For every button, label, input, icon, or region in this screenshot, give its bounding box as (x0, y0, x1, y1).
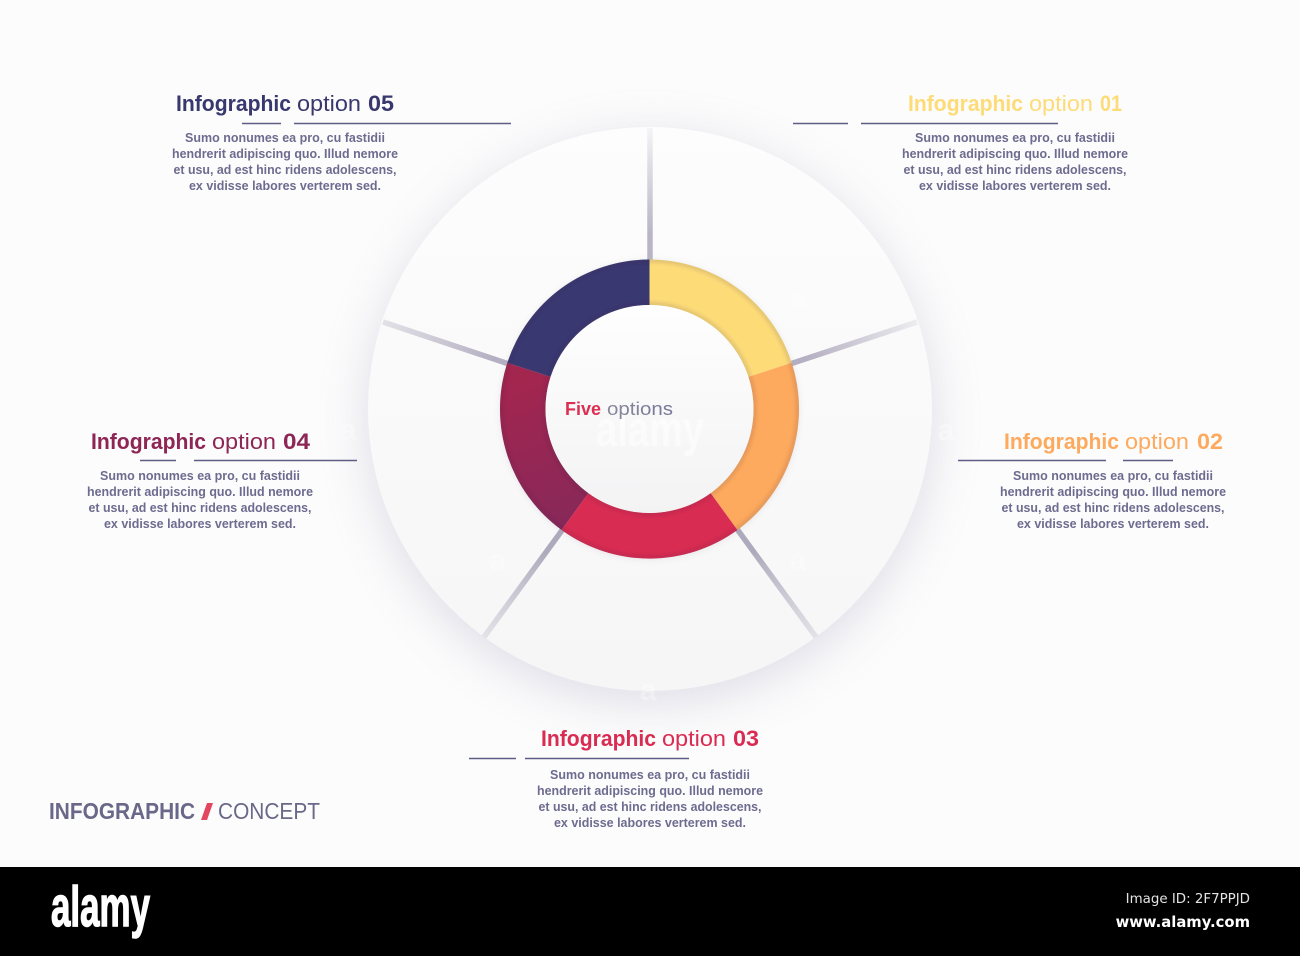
concept label: INFOGRAPHIC (49, 798, 195, 824)
spokes (383, 128, 917, 637)
option 02 (958, 429, 1226, 531)
segment 01 yellow (650, 260, 792, 377)
body text: ex vidisse labores verterem sed. (104, 517, 296, 531)
body text: Sumo nonumes ea pro, cu fastidii (1013, 469, 1213, 483)
watermark marks: a (490, 544, 507, 577)
heading (91, 429, 311, 454)
website: www.alamy.com (1116, 914, 1250, 931)
body text (172, 131, 398, 193)
heading (541, 726, 759, 751)
watermark: alamy (596, 401, 704, 457)
heading: option (1125, 429, 1189, 454)
heading (908, 91, 1122, 116)
heading: option (1029, 91, 1093, 116)
watermark marks: a (340, 414, 357, 447)
body text: hendrerit adipiscing quo. Illud nemore (1000, 485, 1226, 499)
watermark marks (340, 282, 955, 707)
body text: Sumo nonumes ea pro, cu fastidii (550, 768, 750, 782)
body text (1000, 469, 1226, 531)
watermark marks: a (640, 674, 657, 707)
option 04 (87, 429, 357, 531)
heading (176, 91, 394, 116)
center label (565, 399, 673, 419)
option 03 (469, 726, 763, 830)
body text: hendrerit adipiscing quo. Illud nemore (902, 147, 1128, 161)
rule (958, 460, 1173, 462)
heading: Infographic (91, 429, 206, 454)
heading: Infographic (908, 91, 1023, 116)
body text (902, 131, 1128, 193)
footer band (0, 867, 1300, 956)
segment 03 red (562, 493, 737, 559)
rule (469, 758, 689, 760)
body text: ex vidisse labores verterem sed. (554, 816, 746, 830)
option 01 (793, 91, 1128, 193)
heading: 02 (1197, 429, 1223, 454)
inner disc (546, 305, 754, 513)
image id: Image ID: 2F7PPJD (1126, 892, 1250, 907)
rule (140, 460, 357, 462)
heading: Infographic (176, 91, 291, 116)
body text: ex vidisse labores verterem sed. (919, 179, 1111, 193)
body text: ex vidisse labores verterem sed. (189, 179, 381, 193)
heading: option (662, 726, 726, 751)
heading: option (212, 429, 276, 454)
watermark marks: a (790, 282, 807, 315)
body text: ex vidisse labores verterem sed. (1017, 517, 1209, 531)
body text: Sumo nonumes ea pro, cu fastidii (185, 131, 385, 145)
body text: Sumo nonumes ea pro, cu fastidii (100, 469, 300, 483)
body text: Sumo nonumes ea pro, cu fastidii (915, 131, 1115, 145)
concept label (49, 798, 320, 824)
body text: hendrerit adipiscing quo. Illud nemore (87, 485, 313, 499)
heading: option (297, 91, 361, 116)
heading: 01 (1100, 91, 1122, 116)
icon: slash (201, 803, 213, 820)
watermark marks: a (790, 544, 807, 577)
alamy logo: alamy (51, 875, 150, 939)
center label: Five (565, 399, 601, 419)
rule (793, 122, 1058, 124)
heading: Infographic (1004, 429, 1119, 454)
body text: et usu, ad est hinc ridens adolescens, (1002, 501, 1224, 515)
ring shadow (500, 260, 800, 560)
heading: Infographic (541, 726, 656, 751)
body text: hendrerit adipiscing quo. Illud nemore (172, 147, 398, 161)
heading: 05 (368, 91, 394, 116)
heading (1004, 429, 1223, 454)
segment 02 orange (711, 363, 799, 530)
watermark marks: a (938, 414, 955, 447)
body text: et usu, ad est hinc ridens adolescens, (174, 163, 396, 177)
center label: options (607, 399, 673, 419)
disc shadow (370, 140, 930, 700)
concept label: CONCEPT (218, 798, 320, 824)
body text: et usu, ad est hinc ridens adolescens, (538, 800, 762, 814)
body text: et usu, ad est hinc ridens adolescens, (904, 163, 1126, 177)
option 05 (172, 91, 511, 193)
large disc (368, 127, 932, 691)
heading: 04 (283, 429, 311, 454)
donut chart: five options (340, 127, 955, 707)
ring bevel (500, 260, 799, 558)
body text (87, 469, 313, 531)
body text (537, 768, 763, 830)
body text: hendrerit adipiscing quo. Illud nemore (537, 784, 763, 798)
segment 04 maroon (500, 363, 588, 530)
segment 05 navy (507, 259, 650, 377)
rule (242, 122, 511, 124)
body text: et usu, ad est hinc ridens adolescens, (88, 501, 312, 515)
heading: 03 (733, 726, 759, 751)
